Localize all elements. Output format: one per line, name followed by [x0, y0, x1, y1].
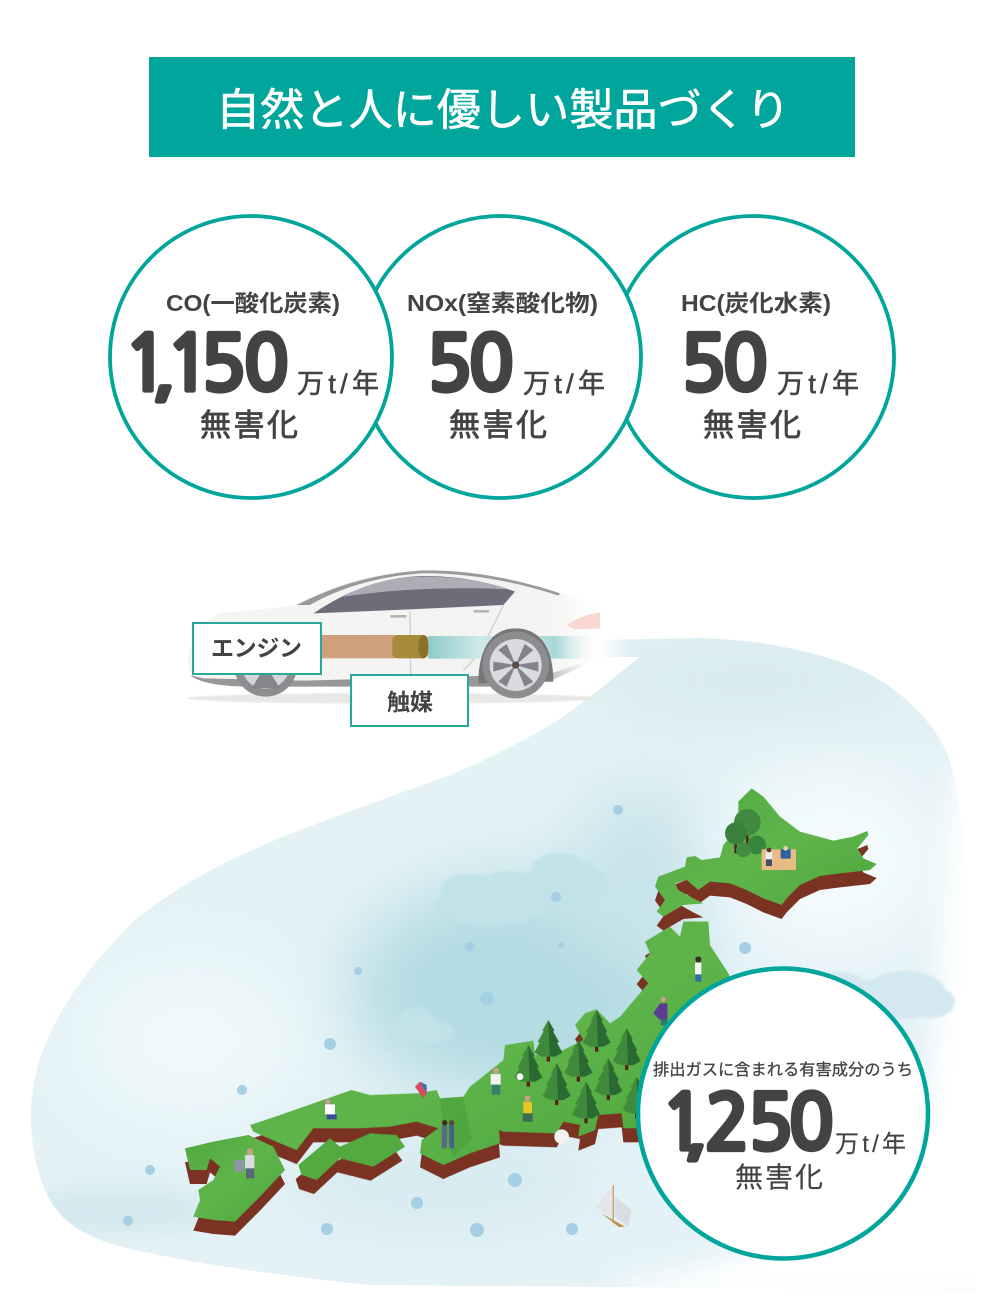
circle: total: 万t/年: [835, 1131, 906, 1158]
label: engine: [193, 623, 321, 674]
circle: NOx: [359, 216, 641, 498]
Kyushu: [185, 1135, 285, 1236]
circle: NOx: NOx(窒素酸化物): [407, 290, 598, 316]
map: Hokkaido: [655, 788, 877, 931]
exhaust flow: [428, 636, 598, 659]
rear wheel: [478, 628, 553, 698]
label: engine: エンジン: [211, 635, 302, 661]
circle: total: 1,250: [660, 1086, 835, 1162]
people on the map: [234, 956, 701, 1178]
circle: total: [638, 968, 928, 1258]
circle: total: 無害化: [735, 1162, 823, 1193]
label: catalyst: 触媒: [387, 689, 433, 715]
label: catalyst: [351, 675, 468, 726]
Shikoku: [296, 1133, 405, 1194]
circle: NOx: 万t/年: [523, 369, 605, 399]
title banner: [149, 57, 855, 157]
sailboat: [595, 1185, 632, 1227]
circle: HC: [612, 216, 894, 498]
circle: CO: CO(一酸化炭素): [166, 290, 340, 316]
clouds: [387, 853, 955, 1044]
car window: [313, 576, 515, 613]
circle: HC: HC(炭化水素): [681, 290, 831, 316]
circle: CO: [110, 216, 392, 498]
car: [187, 570, 600, 704]
forest: [514, 1010, 651, 1123]
engine pipe: [322, 635, 395, 658]
circle: CO: 無害化: [200, 408, 298, 443]
circle: HC: 万t/年: [777, 369, 859, 399]
circle: CO: 1,150: [123, 327, 290, 403]
catalyst: [392, 635, 428, 658]
trees and picnic on Hokkaido: [725, 809, 796, 870]
sky and road background: [10, 636, 1005, 1300]
Honshu: [250, 922, 753, 1179]
circle: total: 排出ガスに含まれる有害成分のうち: [653, 1061, 913, 1079]
circle: HC: 無害化: [703, 408, 801, 443]
circle: HC: 50: [680, 327, 769, 403]
title banner: 自然と人に優しい製品づくり: [216, 86, 790, 135]
circle: NOx: 無害化: [449, 408, 547, 443]
circle: CO: 万t/年: [297, 369, 379, 399]
water drops: [123, 805, 751, 1237]
circle: NOx: 50: [426, 327, 515, 403]
front wheel: [234, 633, 297, 697]
map: Honshu, Shikoku, Kyushu: [185, 922, 753, 1236]
